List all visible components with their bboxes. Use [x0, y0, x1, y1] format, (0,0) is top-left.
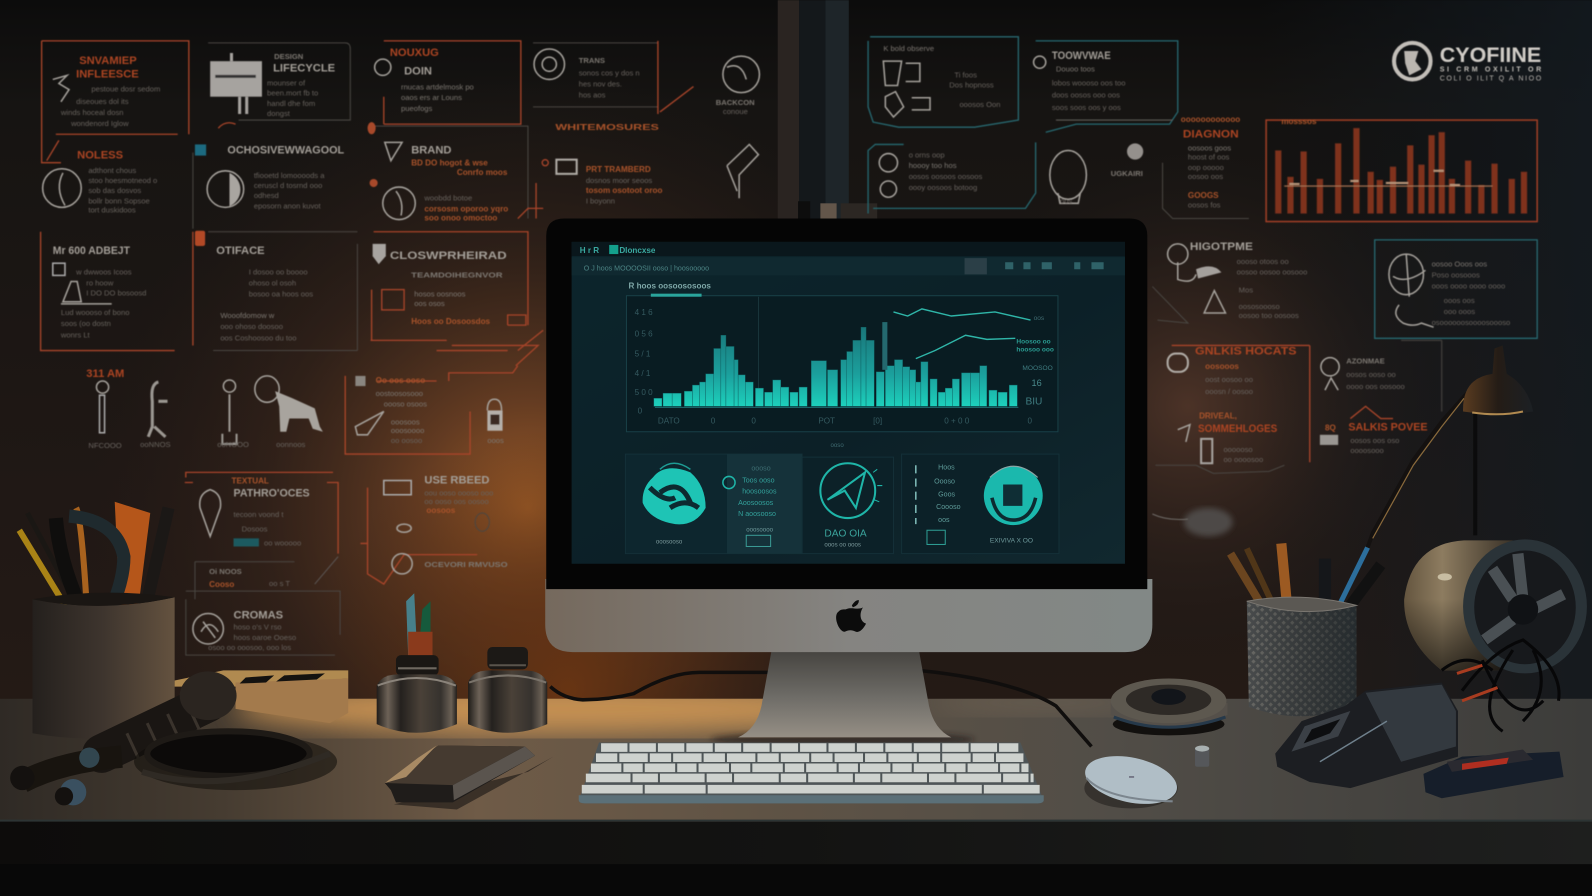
panel: teal sketch card: Ti foos — [954, 70, 977, 79]
panel: use breed: oo ooso oos oosoo — [424, 497, 489, 506]
panel: tools row: oonnoos — [276, 440, 306, 449]
panel: top design card — [208, 43, 350, 120]
text: diagnose list: DIAGNON — [1183, 128, 1239, 140]
panel: materials: Lud woooso of bono — [61, 308, 129, 317]
bar chart: orange top right: mosssos — [1281, 117, 1317, 126]
panel: measures: dosnos moor seoos — [586, 176, 652, 185]
panel: pathroces: Dosoos — [242, 524, 268, 533]
axis labels: DATO — [658, 417, 680, 426]
panel: cromas: hoso o's V rso — [234, 623, 282, 632]
icon: tool one — [96, 381, 109, 433]
panel: triangle brand: corsosm oporoo yqro — [424, 204, 508, 213]
panel: triangle brand — [368, 122, 528, 223]
axis labels: 0 — [751, 417, 756, 426]
panel: OCHOSIVE: OCHOSIVEWWAGOOL — [227, 145, 344, 157]
headphones and cable — [10, 671, 337, 805]
panel: AZONMAE — [1321, 340, 1442, 411]
chart right legend — [1016, 315, 1054, 407]
panel: top-left summary: winds hoceal dosn — [60, 108, 124, 117]
panel: AZONMAE: AZONMAE — [1346, 357, 1385, 366]
panel: tools row: ooNNOS — [140, 440, 171, 449]
icon: apple logo — [836, 600, 866, 632]
icon: head profile: oos — [1060, 196, 1072, 205]
icon: wrench sketch — [727, 144, 758, 198]
keyboard — [579, 742, 1044, 803]
panel: triangle brand: BD DO hogot & wse — [411, 159, 488, 168]
monitor stand — [738, 650, 951, 737]
disc spool — [1111, 678, 1228, 735]
icon: backup globe: BACKCON — [716, 98, 755, 107]
icon: lock — [487, 399, 504, 445]
pens — [19, 502, 169, 609]
panel: teal sketch card: Dos hopnoss — [949, 81, 994, 90]
lamp shade — [1463, 345, 1533, 414]
panel: NOLESS — [43, 140, 193, 229]
axis labels: 0 — [638, 406, 643, 415]
icon: grey box tool — [210, 53, 262, 114]
panel: teal card right — [1375, 240, 1537, 338]
panel: left gauge — [625, 454, 802, 554]
panel: house card: ooosoooo — [391, 426, 424, 435]
panel: top middle with circle icon: sonos cos y dos n — [579, 68, 640, 77]
panel: closure shield: CLOSWPRHEIRAD — [390, 250, 507, 262]
axis labels: 4 1 6 — [635, 308, 653, 317]
chart right legend: MOOSOO — [1022, 365, 1053, 372]
smoke blob — [1152, 508, 1233, 536]
panel: NOLESS: adthont chous — [88, 166, 136, 175]
chart right legend: hoosoo ooo — [1016, 347, 1054, 354]
panel: top design card: handl dhe fom — [267, 99, 315, 108]
text: diagnose list: hoost of oos — [1188, 153, 1230, 162]
panel: left gauge: Toos ooso — [742, 477, 775, 485]
panel: on noods: Oi NOOS — [209, 567, 242, 576]
panel: OCHOSIVE — [195, 123, 344, 210]
panel: teal tower card: TOOWVWAE — [1052, 50, 1111, 62]
icon: tool three — [222, 380, 237, 444]
panel: tools row: ooNOOO — [217, 440, 249, 449]
monitor bezel — [546, 219, 1147, 589]
panel: teal card right: oosoo Ooos oos — [1432, 259, 1487, 268]
text: diagnose list: oosoos goos — [1188, 144, 1231, 153]
wall background — [0, 0, 1592, 711]
panel: OTIFACE: ohoso ol osoh — [249, 279, 296, 288]
panel: right gauge: Goos — [938, 491, 956, 499]
panel: tools row: NFCOOO — [88, 441, 122, 450]
panel: GNLKIS — [1168, 345, 1310, 462]
panel: use breed — [360, 475, 508, 584]
bar chart: orange top right — [1266, 117, 1537, 222]
panel: materials — [41, 232, 193, 351]
chart right legend: Hoosoo oo — [1016, 338, 1051, 345]
monitor — [545, 219, 1152, 737]
icon: lock: ooos — [487, 436, 504, 445]
panel: top-left summary: INFLEESCE — [76, 68, 139, 80]
pens — [1231, 543, 1381, 609]
panel: top-left summary: SNVAMIEP — [79, 55, 137, 67]
panel: measures: PRT TRAMBERD — [586, 165, 651, 174]
panel: left gauge: oooso — [751, 464, 771, 472]
panel: right gauge: Coooso — [936, 503, 961, 511]
panel: OTIFACE: ooo ohoso doosoo — [220, 322, 283, 331]
panel: closure shield: Hoos oo Dosoosdos — [411, 317, 491, 326]
chart right legend: BIU — [1025, 396, 1042, 407]
mouse — [1081, 748, 1181, 812]
panel: HIGOTPME — [1152, 241, 1307, 323]
panel: top design card: DESIGN — [274, 52, 303, 61]
screen toolbar: O J hoos MOOOOSII ooso | hoosooooo — [584, 264, 709, 272]
panel: house card: oo oosoo — [391, 436, 422, 445]
panel: cromas — [186, 591, 340, 655]
panel: GNLKIS: ooosn / oosoo — [1205, 387, 1253, 396]
bottle with wires — [377, 593, 457, 733]
logo — [1394, 43, 1542, 82]
bottle two — [468, 647, 547, 733]
panel: GNLKIS: oosooos — [1205, 362, 1239, 371]
connector: elbow right of closure panel — [378, 330, 543, 381]
hand tool — [1423, 750, 1564, 798]
panel: OTIFACE: oos Coshoosoo du too — [220, 333, 296, 342]
panel: right gauge: Oooso — [934, 478, 955, 486]
panel: on noods: oo s T — [269, 579, 290, 588]
panel: left gauge: ooosoooo — [746, 526, 774, 533]
panel: house card: ooosoos — [391, 418, 420, 427]
panel: NOUXUG: rnucas artdelmosk po — [401, 83, 474, 92]
logo: CYOFIINE — [1440, 43, 1541, 67]
panel: OCHOSIVE: eposorn anon kuvot — [254, 201, 322, 210]
panel: top design card: dongst — [267, 109, 291, 118]
line series — [893, 309, 1031, 320]
panel: closure shield: hosos oosnoos — [414, 290, 466, 299]
panel: right gauge — [902, 454, 1059, 554]
panel: top middle with circle icon: hes nov des. — [579, 80, 622, 89]
pen cup right — [1231, 543, 1381, 716]
panel: salkis power: oooosooo — [1350, 446, 1384, 455]
panel: top middle with circle icon: hos aos — [579, 91, 606, 100]
panel: top middle with circle icon: TRANS — [579, 56, 605, 65]
speaker can — [1404, 539, 1587, 673]
panel: teal sketch card — [868, 37, 1018, 127]
panel: on noods: Cooso — [209, 580, 234, 589]
panel: middle gauge — [802, 442, 893, 554]
axis labels — [635, 308, 1032, 426]
panel: pathroces: tecoon voond t — [234, 510, 284, 519]
icon: dog — [255, 376, 323, 432]
panel: OTIFACE: Wooofdomow w — [220, 311, 275, 320]
panel: HIGOTPME: oososoooso — [1239, 302, 1280, 311]
earbuds — [10, 748, 100, 805]
panel: GNLKIS: oost oosoo oo — [1205, 375, 1253, 384]
panel: pathroces — [185, 472, 338, 554]
panel: GNLKIS: GNLKIS HOCATS — [1195, 346, 1297, 358]
panel: teal sketch card: ooosos Oon — [959, 100, 1001, 109]
panel: triangle brand: woobdd botoe — [423, 193, 472, 202]
axis labels: 4 / 1 — [635, 369, 651, 378]
panel: teal card right: ooos oooo oooo oooo — [1432, 282, 1505, 291]
panel: left gauge: ooosooso — [656, 538, 683, 545]
panel: left gauge: hoosoosos — [742, 488, 777, 496]
panel: teal tower card — [1034, 41, 1178, 132]
panel: tools row: 311 AM — [86, 368, 124, 380]
panel: house card: Oo oos ooso — [376, 376, 425, 385]
axis labels: [0] — [873, 417, 882, 426]
chart frame — [626, 294, 1058, 432]
panel: pathroces: PATHRO'OCES — [234, 488, 310, 500]
panel: top design card: mounser of — [267, 79, 306, 88]
chart right legend: oos — [1034, 315, 1045, 322]
panel: NOUXUG: DOIN — [404, 65, 432, 77]
text: diagnose list: oooooooooooo — [1181, 115, 1240, 124]
panel: NOLESS: NOLESS — [77, 150, 123, 162]
panel: NOLESS: sob das dosvos — [88, 186, 141, 195]
panel: top-left summary: wondenord Iglow — [70, 119, 129, 128]
box on desk — [175, 670, 348, 723]
panel: OTIFACE — [195, 231, 357, 351]
panel: triangle brand: Conrfo moos — [457, 168, 508, 177]
icon: grey node with label — [1111, 143, 1143, 178]
panel: measures: I boyonn — [586, 196, 615, 205]
panel: NOLESS: stoo hoesmotneod o — [88, 176, 157, 185]
panel: tools row — [86, 368, 323, 450]
panel: materials: soos (oo dostn — [61, 319, 111, 328]
panel: left gauge: Aoosoosos — [738, 499, 774, 507]
panel: right gauge: EXIVIVA X OO — [990, 537, 1033, 544]
panel: use breed: OCEVORI RMVUSO — [424, 560, 508, 569]
lamp — [1368, 345, 1533, 548]
panel: AZONMAE: oosos ooso oo — [1346, 370, 1396, 379]
screen toolbar: H r R — [580, 246, 599, 255]
vertical pillar behind monitor — [778, 0, 877, 219]
panel: top-left summary — [42, 41, 189, 163]
axis labels: POT — [818, 417, 835, 426]
panel: NOUXUG — [375, 41, 521, 124]
panel: AZONMAE: oooo oos oosooo — [1346, 382, 1405, 391]
panel: teal clock card: oosos oosoos oosoos — [909, 172, 983, 181]
icon: backup globe: conoue — [723, 107, 748, 116]
panel: top-left summary: diseoues dol its — [76, 97, 129, 106]
pen cup left — [19, 502, 175, 739]
bars — [654, 327, 1017, 406]
panel: on noods — [195, 557, 338, 599]
screen — [572, 242, 1125, 564]
panel: NOUXUG: pueofogs — [401, 104, 433, 113]
panel: pathroces: TEXTUAL — [231, 477, 269, 486]
panel: cromas: CROMAS — [234, 610, 283, 622]
screen toolbar — [572, 242, 1125, 275]
icon: teal tag — [195, 144, 206, 156]
panel: teal clock card: hoooy too hos — [909, 161, 957, 170]
panel: drivesal: oo oooosoo — [1223, 455, 1263, 464]
panel: teal card right: osoooooosoooosoooso — [1432, 318, 1510, 327]
axis labels: 0 5 6 — [635, 329, 653, 338]
panel: house card — [345, 376, 504, 454]
panel: materials: ro hoow — [86, 279, 114, 288]
panel: cromas: osoo oo ooosoo, ooo los — [208, 643, 291, 652]
panel: OCHOSIVE: ceruscl d tosrnd ooo — [254, 181, 322, 190]
chart right legend: 16 — [1032, 378, 1042, 388]
panel: salkis power: 8Q — [1325, 424, 1336, 433]
panel: closure shield — [371, 232, 538, 366]
panel: OTIFACE: I dosoo oo boooo — [249, 267, 308, 276]
text: diagnose list — [1163, 115, 1249, 219]
panel: top-left summary: pestoue dosr sedom — [91, 85, 160, 94]
panel: measures — [518, 123, 662, 219]
panel: teal sketch card: K bold observe — [883, 44, 934, 53]
axis labels: 5 0 0 — [635, 388, 653, 397]
panel: top middle with circle icon — [533, 41, 693, 114]
panel: middle gauge: DAO OIA — [824, 528, 867, 539]
panel: right gauge: oos — [938, 516, 950, 524]
icon: backup globe — [716, 56, 759, 116]
icon: tool two — [148, 382, 168, 437]
panel: house card: oostoososooo — [376, 389, 423, 398]
panel: middle gauge: ooso — [831, 442, 844, 449]
panel: HIGOTPME: oosoo oosoo oosooo — [1237, 267, 1307, 276]
icon: teal blob — [643, 468, 706, 524]
small red details — [1457, 665, 1498, 701]
panel: left gauge: N aoosooso — [738, 510, 776, 518]
panel: measures: tosom osotoot oroo — [586, 186, 662, 195]
panel: teal clock card: oooy oosoos botoog — [909, 183, 977, 192]
panel: measures: WHITEMOSURES — [555, 123, 660, 132]
panel: right gauge: Hoos — [938, 463, 955, 471]
panel: HIGOTPME: Mos — [1239, 286, 1253, 295]
monitor chin — [545, 579, 1152, 652]
panel: middle gauge: ooos oo ooos — [824, 541, 861, 548]
panel: use breed: oosoos — [426, 506, 456, 515]
panel: teal card right: ooos oos — [1444, 296, 1475, 305]
icon: grey node with label: UGKAIRI — [1111, 169, 1143, 178]
panel: HIGOTPME: oosoo too oosoos — [1239, 311, 1299, 320]
monitor shadow on desk — [711, 731, 975, 748]
panel: teal clock card: o orns oop — [909, 151, 945, 160]
panel: materials: wonrs Lt — [60, 330, 91, 339]
panel: teal card right: Poso oosooos — [1432, 270, 1480, 279]
text: diagnose list: GOOGS — [1188, 191, 1219, 200]
panel: use breed: USE RBEED — [424, 475, 489, 487]
phone — [385, 745, 553, 809]
panel: teal card right: ooo ooos — [1444, 307, 1475, 316]
panel: drivesal: DRIVEAL, — [1199, 412, 1237, 421]
panel: salkis power: SALKIS POVEE — [1348, 422, 1428, 434]
panel: teal tower card: soos soos oos y oos — [1052, 103, 1121, 112]
panel: salkis power: oosos oos oso — [1350, 436, 1399, 445]
axis labels: 0 — [1027, 417, 1032, 426]
logo: SI CRM OXILIT OR — [1440, 65, 1541, 73]
icon: head profile — [1050, 151, 1086, 205]
text: diagnose list: oop ooooo — [1188, 163, 1224, 172]
wires — [1442, 640, 1559, 731]
panel: triangle brand: soo onoo omoctoo — [424, 214, 497, 223]
icon: teal disc — [984, 466, 1043, 525]
panel: materials: w dwwoos Icoos — [75, 267, 132, 276]
panel: drivesal: SOMMEHLOGES — [1198, 423, 1277, 435]
panel: teal tower card: Douoo toos — [1056, 64, 1095, 73]
panel: house card: oooso osoos — [384, 399, 427, 408]
panel: teal tower card: lobos woooso oos too — [1052, 79, 1125, 88]
panel: materials: I DO DO bosoosd — [86, 289, 146, 298]
panel: NOUXUG: NOUXUG — [390, 47, 439, 59]
panel: cromas: hoos oaroe Ooeso — [234, 633, 296, 642]
text: diagnose list: oosos fos — [1188, 200, 1221, 209]
desk surface — [0, 698, 1592, 864]
panel: drivesal — [1155, 412, 1284, 473]
panel: materials: Mr 600 ADBEJT — [53, 245, 130, 257]
axis labels: 5 / 1 — [635, 350, 651, 359]
panel: HIGOTPME: HIGOTPME — [1190, 241, 1253, 253]
small peg — [1195, 745, 1209, 767]
icon: orange tag — [195, 231, 205, 246]
panel: triangle brand: BRAND — [411, 145, 451, 157]
panel: NOLESS: tort duskidoos — [88, 205, 136, 214]
panel: closure shield: TEAMDOIHEGNVOR — [411, 270, 503, 279]
screen toolbar: Dloncxse — [619, 246, 656, 255]
logo: COLI O ILIT Q A NIOO — [1440, 74, 1542, 82]
panel: teal tower card: doos oosos ooo oos — [1052, 91, 1120, 100]
panel: closure shield: oos osos — [414, 299, 445, 308]
panel: OCHOSIVE: tfiooetd lomoooods a — [254, 171, 325, 180]
panel: NOUXUG: oaos ers ar Louns — [401, 93, 462, 102]
axis labels: 0 + 0 0 — [944, 417, 970, 426]
panel: pathroces: oo wooooo — [264, 538, 301, 547]
panel: OCHOSIVE: odhesd — [254, 191, 279, 200]
panel: top design card: been.mort fb to — [267, 89, 318, 98]
panel: OTIFACE: bosoo oa hoos oos — [249, 290, 313, 299]
panel: drivesal: oooooso — [1223, 445, 1253, 454]
panel: NOLESS: bollr bonn Sopsoe — [88, 196, 150, 205]
cable from monitor — [550, 670, 1091, 746]
panel: top design card: LIFECYCLE — [273, 62, 335, 74]
panel: teal clock card — [868, 142, 1036, 213]
text: diagnose list: oosoo oos — [1188, 172, 1223, 181]
chart title: R hoos oosoososoos — [628, 282, 711, 291]
panel: use breed: oou ooso oooso ooo — [424, 489, 493, 498]
tape dispenser toy — [1275, 683, 1458, 788]
panel: salkis power — [1320, 406, 1428, 455]
panel: OTIFACE: OTIFACE — [216, 245, 265, 257]
panel: HIGOTPME: oooso otoos oo — [1237, 257, 1289, 266]
axis labels: 0 — [711, 417, 716, 426]
